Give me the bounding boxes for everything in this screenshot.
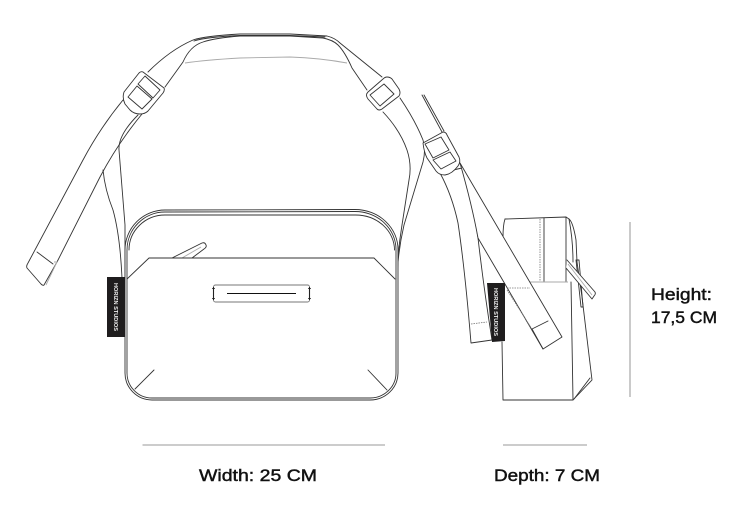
height label: 17,5 CM (651, 308, 717, 327)
top shoulder strap (148, 34, 382, 90)
side view of bag (422, 95, 595, 400)
depth label: Depth: 7 CM (494, 466, 600, 485)
side strap buckle (422, 95, 460, 175)
right shoulder strap (383, 98, 424, 285)
width dimension line (142, 444, 385, 446)
zipper pull (172, 243, 206, 258)
depth dimension line (503, 444, 587, 446)
front pocket corner creases (135, 370, 387, 390)
brand tag: HORIZN STUDIOS (112, 283, 118, 331)
side brand tag: HORIZN STUDIOS (492, 288, 498, 336)
side zipper pull (566, 260, 595, 307)
front view of bag (27, 34, 425, 400)
width label: Width: 25 CM (199, 466, 317, 485)
handle patch (212, 285, 311, 302)
front pocket flap (127, 258, 395, 279)
side brand tag (487, 283, 505, 342)
front hanging strap (460, 163, 562, 349)
bag body (125, 210, 398, 400)
height label (651, 285, 717, 327)
left strap buckle (123, 72, 164, 114)
side bag body (502, 217, 592, 400)
height dimension line (629, 222, 631, 397)
right strap buckle (366, 77, 400, 110)
long hanging strap (440, 168, 492, 343)
height label: Height: (651, 285, 712, 304)
left shoulder strap (27, 100, 142, 285)
brand tag (107, 277, 125, 337)
